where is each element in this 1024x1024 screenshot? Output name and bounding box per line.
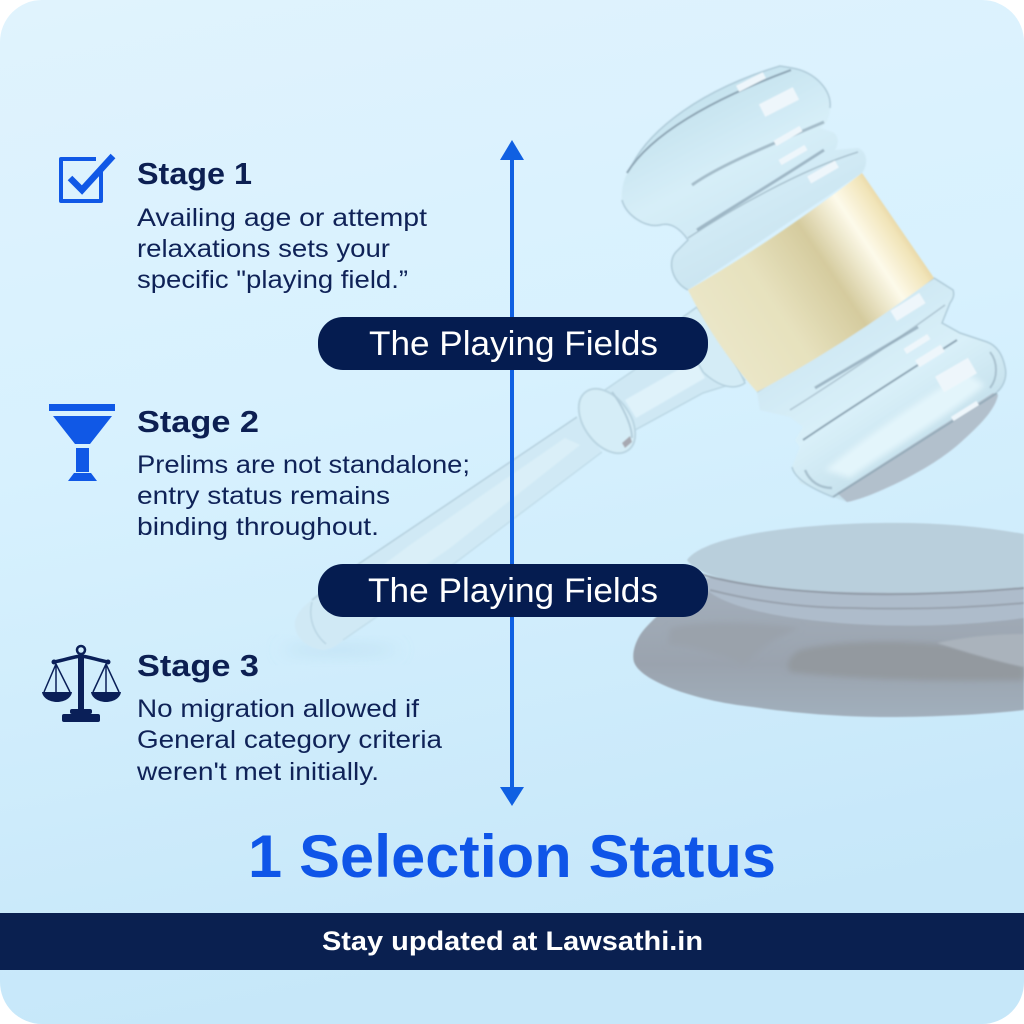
illustration: sound block — [633, 523, 1024, 717]
text: stage 2 description: Prelims are not standalone; — [137, 451, 470, 479]
text: stage 3 description: No migration allowed if — [137, 695, 419, 723]
pill: the playing fields 1 — [318, 317, 708, 370]
footer banner — [0, 913, 1024, 970]
heading: stage 3: Stage 3 — [137, 648, 259, 683]
vertical double-headed arrow — [500, 140, 524, 806]
footer banner: Stay updated at Lawsathi.in — [322, 926, 703, 956]
stage 1 block — [61, 156, 427, 294]
text: stage 1 description: specific "playing field.” — [137, 266, 408, 294]
pill: the playing fields 2 — [318, 564, 708, 617]
icon: scales of justice — [42, 646, 121, 722]
icon: checkbox — [61, 156, 113, 201]
text: stage 1 description: relaxations sets your — [137, 235, 390, 263]
pill: the playing fields 2: The Playing Fields — [368, 572, 658, 610]
text: stage 3 description: General category criteria — [137, 726, 442, 754]
heading: stage 1: Stage 1 — [137, 156, 252, 191]
text: stage 2 description — [137, 451, 470, 541]
grooves lower — [790, 305, 997, 497]
text: stage 3 description — [136, 695, 442, 786]
stage 2 block — [49, 404, 470, 541]
glass highlights — [736, 72, 979, 421]
text: stage 1 description — [137, 204, 427, 294]
icon: funnel — [49, 404, 115, 481]
illustration: gavel head — [622, 66, 1006, 502]
gold band — [688, 173, 934, 392]
heading: stage 2: Stage 2 — [137, 404, 259, 439]
illustration: gavel handle — [280, 307, 745, 653]
text: stage 1 description: Availing age or attempt — [137, 204, 427, 232]
stage 3 block — [42, 646, 442, 786]
text: stage 3 description: weren't met initially. — [136, 758, 379, 786]
head upper section — [622, 66, 866, 290]
grooves upper — [627, 70, 858, 238]
title: 1 selection status: 1 Selection Status — [248, 823, 776, 890]
text: stage 2 description: binding throughout. — [137, 513, 379, 541]
pill: the playing fields 1: The Playing Fields — [369, 325, 658, 363]
text: stage 2 description: entry status remains — [137, 482, 390, 510]
head lower section — [757, 278, 1006, 502]
